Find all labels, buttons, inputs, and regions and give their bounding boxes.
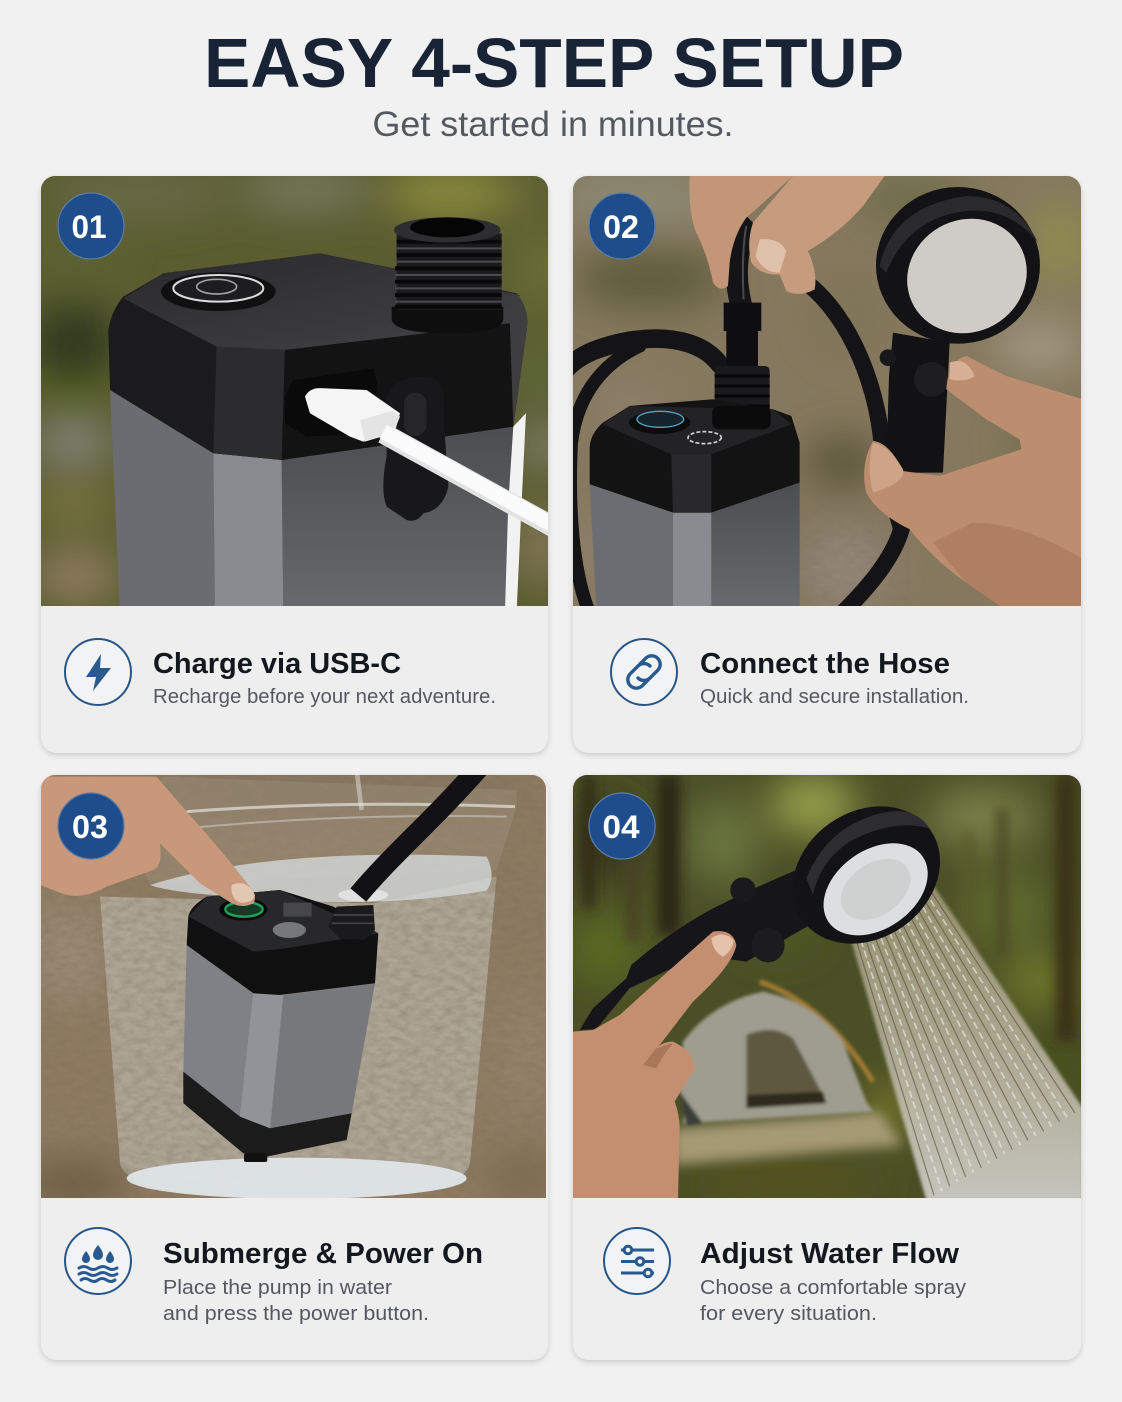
- green power ring: [219, 898, 267, 921]
- description: for every situation.: [700, 1303, 877, 1325]
- power button: [161, 272, 276, 311]
- blurred tree trunks: [583, 775, 1076, 1042]
- pump in scene: [590, 484, 673, 608]
- title: EASY 4-STEP SETUP: [204, 24, 904, 102]
- USB connector and cable: [305, 388, 400, 442]
- shower head: [886, 333, 950, 473]
- shower handle: [580, 870, 810, 1030]
- card background: [573, 775, 1081, 1360]
- description: Recharge before your next adventure.: [153, 686, 496, 708]
- heading: Charge via USB-C: [153, 648, 401, 680]
- number badge 03: [58, 793, 124, 859]
- top hand: [689, 176, 793, 289]
- description: Place the pump in water: [163, 1277, 392, 1299]
- power button: [629, 411, 690, 434]
- USB port and rubber flap: [285, 368, 377, 437]
- icon: lightning bolt: [65, 639, 131, 705]
- card background: [41, 176, 548, 753]
- card background: [41, 775, 548, 1360]
- heading: Submerge & Power On: [163, 1238, 483, 1270]
- panel: step 2 connect hose: [556, 176, 1090, 753]
- card background: [573, 176, 1081, 753]
- hose loops: [556, 223, 901, 613]
- description: Quick and secure installation.: [700, 686, 969, 708]
- photo: pump with USB-C cable: [30, 163, 567, 612]
- description: Choose a comfortable spray: [700, 1277, 966, 1299]
- number badge 01: [58, 193, 124, 259]
- number badge 04: [589, 793, 655, 859]
- panel: step 3 submerge: [17, 767, 563, 1360]
- finger hand: [40, 777, 255, 906]
- icon: chain link: [611, 639, 677, 705]
- heading: Connect the Hose: [700, 648, 950, 680]
- panel: step 4 adjust flow: [570, 775, 1083, 1360]
- spray: [850, 875, 1083, 1200]
- pump body: [110, 390, 215, 612]
- number badge 01: 01: [72, 209, 106, 245]
- panel: step 1 charge: [30, 163, 567, 753]
- bucket with water: [100, 877, 497, 1198]
- blurred ground path: [673, 1112, 903, 1165]
- threaded outlet: [392, 307, 503, 333]
- description: [163, 1277, 429, 1325]
- blurred tent: [680, 982, 873, 1125]
- photo: connecting hose and shower head: [556, 176, 1090, 613]
- shower head: [795, 806, 940, 944]
- right hand: [864, 356, 1083, 608]
- threaded nozzle: [714, 366, 770, 409]
- photo: pump in water bucket: [41, 775, 546, 1198]
- number badge 03: 03: [72, 809, 108, 845]
- pump top cap: [187, 890, 378, 995]
- description: [700, 1277, 966, 1325]
- description: and press the power button.: [163, 1303, 429, 1325]
- heading: Adjust Water Flow: [700, 1238, 959, 1270]
- nozzle: [328, 905, 375, 940]
- photo: shower head spraying with tent: [570, 775, 1083, 1202]
- icon: sliders: [604, 1228, 670, 1294]
- number badge 02: 02: [603, 209, 639, 245]
- pump body: [183, 945, 253, 1117]
- pump black cap: [108, 253, 527, 460]
- hose: [338, 888, 388, 902]
- hand: [573, 931, 736, 1200]
- hose collar: [724, 303, 761, 366]
- number badge 02: [589, 193, 655, 259]
- control labels: [283, 903, 312, 917]
- number badge 04: 04: [602, 809, 640, 845]
- icon: water drops and waves: [65, 1228, 131, 1294]
- subtitle: Get started in minutes.: [372, 105, 734, 144]
